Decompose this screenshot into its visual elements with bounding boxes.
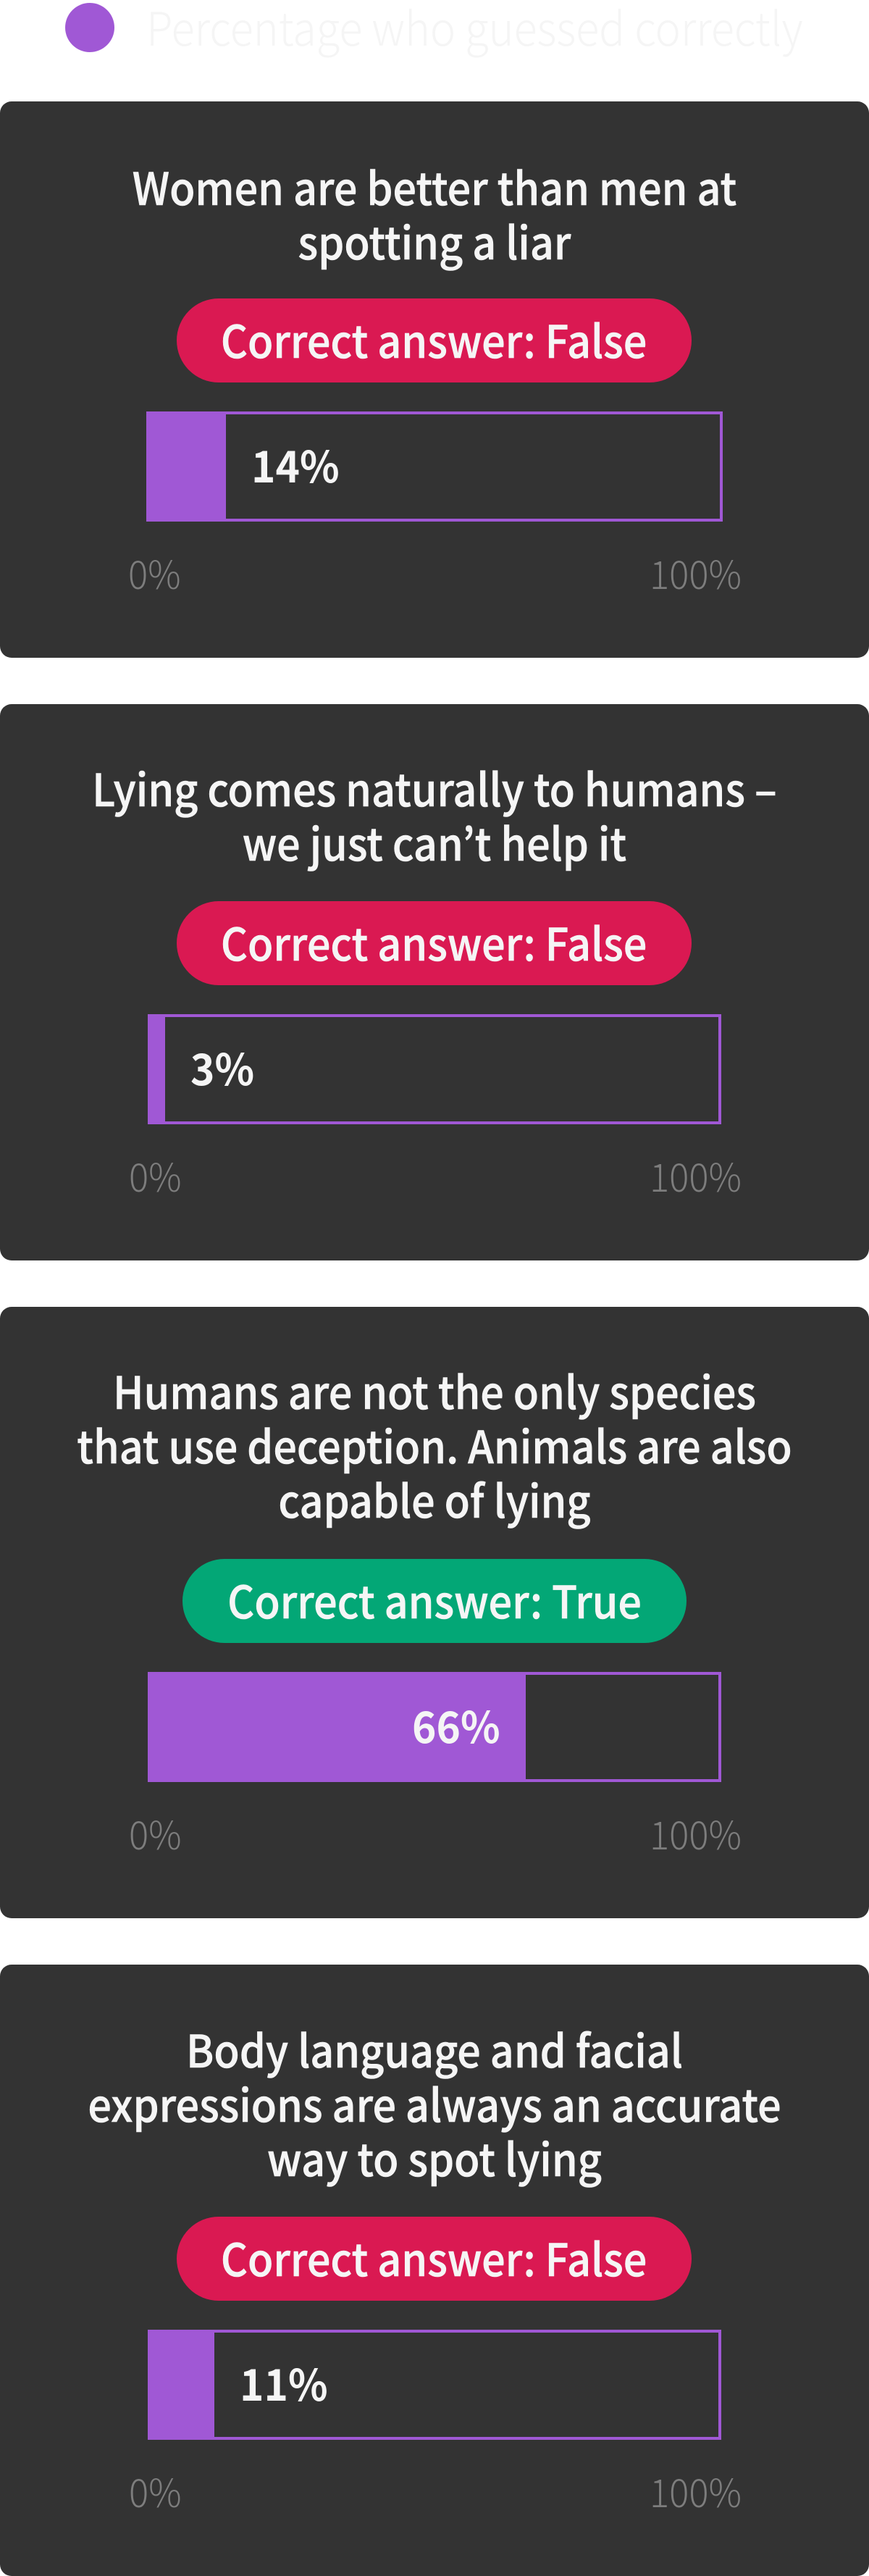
panel: women spotting a liar bbox=[0, 101, 869, 658]
answer pill bbox=[177, 901, 692, 985]
bar chart: 3% bbox=[148, 1014, 721, 1124]
answer pill bbox=[182, 1559, 687, 1643]
value label: 11% bbox=[240, 2351, 328, 2414]
value label: 3% bbox=[190, 1035, 254, 1098]
axis label 0%: 0% bbox=[129, 2462, 182, 2519]
answer pill bbox=[177, 2217, 692, 2301]
question heading bbox=[88, 2015, 781, 2189]
answer pill: Correct answer: False bbox=[221, 2224, 647, 2289]
value label: 66% bbox=[412, 1693, 500, 1756]
bar fill bbox=[148, 1672, 526, 1782]
axis label 100%: 100% bbox=[650, 1804, 742, 1861]
answer pill bbox=[177, 298, 692, 382]
question heading bbox=[133, 153, 736, 272]
question heading: that use deception. Animals are also bbox=[77, 1411, 792, 1476]
answer pill: Correct answer: False bbox=[221, 908, 647, 974]
legend bbox=[65, 0, 803, 59]
question heading: capable of lying bbox=[278, 1465, 591, 1531]
legend dot bbox=[65, 3, 114, 52]
bar chart: 11% bbox=[148, 2330, 721, 2440]
axis label 100%: 100% bbox=[650, 2462, 742, 2519]
question heading: spotting a liar bbox=[298, 207, 571, 272]
bar fill bbox=[148, 1014, 165, 1124]
axis label 100%: 100% bbox=[650, 543, 742, 601]
question heading: Women are better than men at bbox=[133, 153, 736, 218]
question heading: expressions are always an accurate bbox=[88, 2070, 781, 2135]
question heading: Body language and facial bbox=[186, 2015, 683, 2081]
axis label 0%: 0% bbox=[129, 1804, 182, 1861]
question heading: way to spot lying bbox=[267, 2124, 602, 2189]
bar chart: 14% bbox=[146, 411, 723, 522]
panel: lying comes naturally bbox=[0, 704, 869, 1260]
bar fill bbox=[146, 411, 226, 522]
value label: 14% bbox=[251, 432, 340, 495]
question heading: Humans are not the only species bbox=[113, 1357, 756, 1422]
panel: animals deception bbox=[0, 1307, 869, 1918]
bar fill bbox=[148, 2330, 214, 2440]
axis label 100%: 100% bbox=[650, 1146, 742, 1203]
question heading: we just can’t help it bbox=[243, 808, 626, 874]
question heading: Lying comes naturally to humans – bbox=[92, 754, 777, 819]
axis label 0%: 0% bbox=[129, 1146, 182, 1203]
bar chart: 66% bbox=[148, 1672, 721, 1782]
question heading bbox=[92, 754, 777, 874]
answer pill: Correct answer: True bbox=[227, 1566, 642, 1631]
axis label 0%: 0% bbox=[128, 543, 181, 601]
question heading bbox=[77, 1357, 792, 1531]
panel: body language bbox=[0, 1965, 869, 2576]
answer pill: Correct answer: False bbox=[221, 306, 647, 371]
